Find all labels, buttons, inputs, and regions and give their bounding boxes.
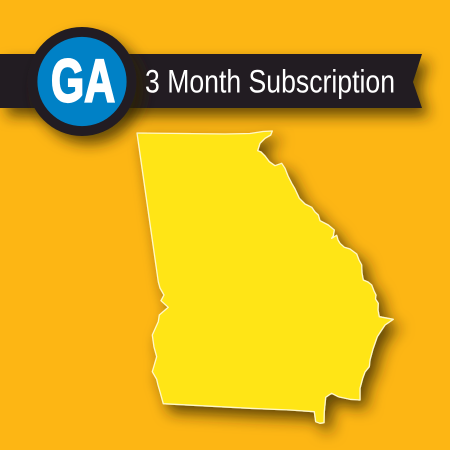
ribbon banner	[0, 54, 422, 108]
badge outer ring	[28, 27, 136, 136]
banner title: 3 Month Subscription	[145, 64, 395, 100]
badge blue disc	[37, 37, 127, 126]
map: state of Georgia	[137, 131, 393, 423]
state badge	[28, 27, 136, 136]
badge text: GA: GA	[51, 48, 115, 114]
